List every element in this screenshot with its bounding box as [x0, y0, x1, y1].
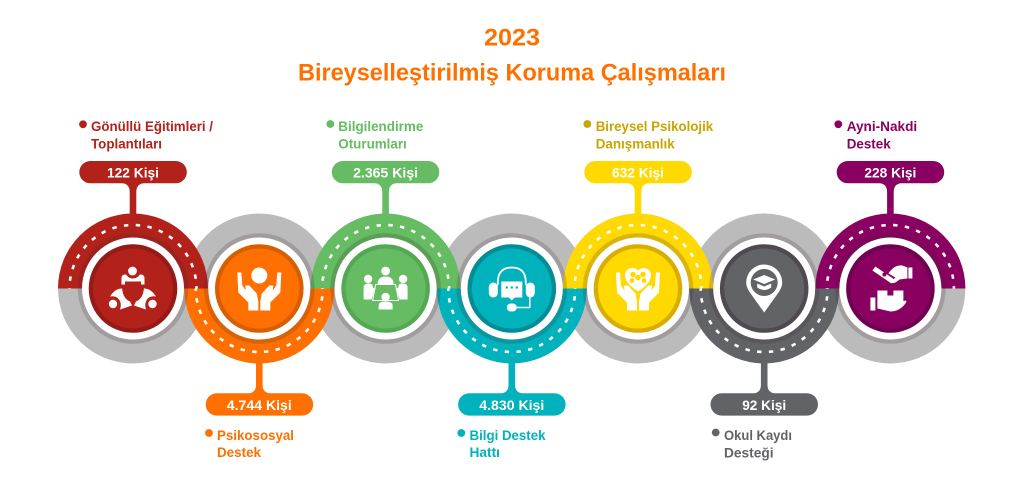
label: Bilgilendirme Oturumları: Oturumları	[338, 135, 407, 151]
label: Okul Kaydı Desteği: Okul Kaydı	[724, 427, 792, 443]
icon disc: volunteers meeting	[89, 244, 177, 333]
icon: handshake with banknote and hand holding box	[870, 265, 912, 312]
label: Psikososyal Destek: Destek	[217, 444, 261, 460]
label: Bilgi Destek Hattı: Bilgi Destek	[470, 427, 546, 443]
label: Ayni-Nakdi Destek: Ayni-Nakdi	[847, 118, 917, 134]
title	[298, 24, 726, 87]
coloured half ring: dark grey	[689, 288, 839, 364]
label: Okul Kaydı Desteği: Desteği	[724, 444, 774, 460]
label: Bilgilendirme Oturumları: Bilgilendirme	[338, 118, 424, 134]
label: Bilgi Destek Hattı: Hattı	[470, 444, 500, 460]
coloured half ring: teal	[437, 288, 587, 364]
connector and count pill: Gönüllü Eğitimleri: 122 Kişi	[107, 165, 159, 181]
coloured half ring: purple	[815, 214, 965, 288]
icon: three people in a circle	[109, 267, 157, 310]
connector and count pill: Bilgi Destek Hattı: 4.830 Kişi	[479, 397, 544, 413]
label: Bireysel Psikolojik Danışmanlık: Bireysel Psikolojik	[596, 118, 713, 134]
white rings	[82, 238, 941, 340]
label: Bilgilendirme Oturumları	[326, 118, 424, 151]
icon: location pin with graduation cap	[746, 264, 782, 312]
icon disc: individual psychological counselling	[594, 244, 682, 333]
road dashes	[70, 225, 954, 352]
connector and count pill: Psikososyal Destek: 4.744 Kişi	[227, 397, 292, 413]
label: Gönüllü Eğitimleri / Toplantıları: Toplantıları	[91, 135, 162, 151]
connector and count pill: Okul Kaydı Desteği	[710, 361, 818, 416]
connector and count pill: Bilgilendirme Oturumları	[332, 161, 439, 216]
icon disc: information support line	[468, 244, 556, 333]
label: Psikososyal Destek	[205, 427, 294, 460]
connector and count pill: Bilgi Destek Hattı	[458, 361, 566, 416]
label: Bireysel Psikolojik Danışmanlık	[583, 118, 713, 151]
label: Okul Kaydı Desteği	[712, 427, 792, 460]
icon: headset with speech bubble	[489, 268, 535, 312]
label: Bilgi Destek Hattı	[457, 427, 546, 460]
label: Psikososyal Destek: Psikososyal	[217, 427, 294, 443]
coloured half ring: green	[311, 214, 461, 288]
shadow rings	[78, 233, 946, 344]
icon: hands holding heart	[616, 268, 660, 310]
label: Ayni-Nakdi Destek	[834, 118, 917, 151]
connector and count pill: Ayni-Nakdi Destek: 228 Kişi	[864, 165, 916, 181]
label: Gönüllü Eğitimleri / Toplantıları	[79, 118, 213, 151]
title: 2023	[484, 24, 540, 52]
connector and count pill: Gönüllü Eğitimleri	[79, 161, 187, 216]
connector and count pill: Bireysel Psikolojik Danışmanlık: 632 Kişi	[612, 165, 664, 181]
title: Bireyselleştirilmiş Koruma Çalışmaları	[298, 60, 726, 87]
coloured half ring: red	[58, 214, 208, 288]
connector and count pill: Bireysel Psikolojik Danışmanlık	[584, 161, 692, 216]
connector and count pill: Psikososyal Destek	[206, 361, 313, 416]
coloured half ring: orange	[184, 288, 334, 364]
connector and count pill: Bilgilendirme Oturumları: 2.365 Kişi	[353, 165, 418, 181]
grey base rings	[58, 214, 965, 364]
icon disc: psychosocial support	[215, 244, 304, 333]
icon disc: information sessions	[341, 244, 430, 333]
icon disc: in-kind and cash support	[846, 244, 935, 333]
icon: hands holding person	[237, 268, 281, 310]
label: Gönüllü Eğitimleri / Toplantıları: Gönüllü Eğitimleri /	[91, 118, 213, 134]
label: Ayni-Nakdi Destek: Destek	[847, 135, 891, 151]
coloured half ring: yellow	[563, 214, 713, 288]
connector and count pill: Ayni-Nakdi Destek	[837, 161, 944, 216]
icon: people around a table	[364, 267, 408, 310]
icon disc: school enrolment support	[720, 244, 808, 333]
connector and count pill: Okul Kaydı Desteği: 92 Kişi	[742, 397, 786, 413]
label: Bireysel Psikolojik Danışmanlık: Danışmanlık	[596, 135, 675, 151]
